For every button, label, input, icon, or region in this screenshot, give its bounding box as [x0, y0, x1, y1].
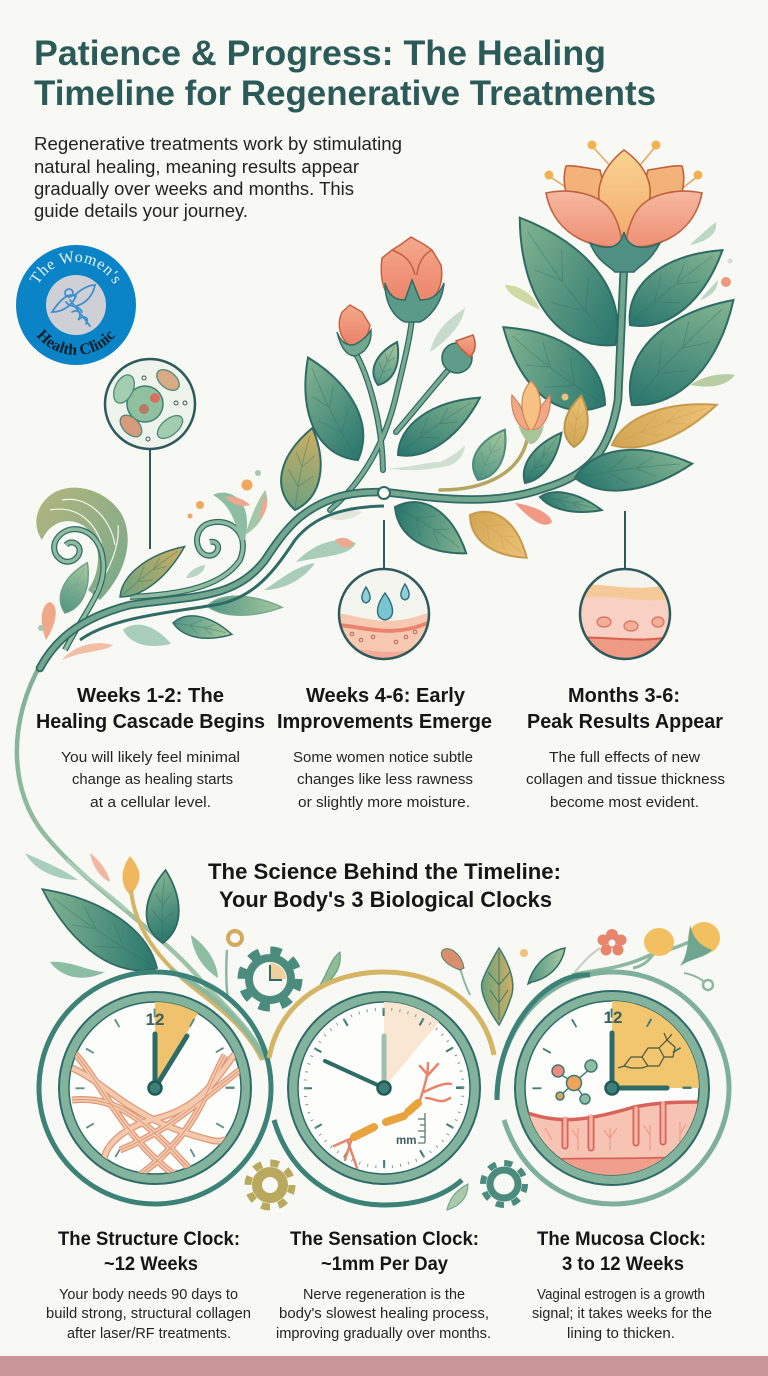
steroid structure: [618, 1033, 675, 1068]
clock: structure: [39, 972, 271, 1204]
fern curl: [36, 488, 128, 650]
main stem: [40, 265, 624, 668]
upper left foliage: [25, 853, 340, 1060]
clock caption: mucosa: The Mucosa Clock:: [537, 1229, 706, 1250]
clinic logo badge: [16, 245, 136, 365]
milestone: weeks 1-2: You will likely feel minimal: [61, 749, 240, 766]
clock caption: structure: ~12 Weeks: [104, 1254, 198, 1275]
clock caption: structure: after laser/RF treatments.: [67, 1325, 231, 1342]
icon: thick skin cross-section: [575, 511, 675, 665]
clock caption: mucosa: signal; it takes weeks for the: [532, 1305, 712, 1322]
mm ruler: mm: [396, 1135, 416, 1147]
clock caption: mucosa: [532, 1229, 712, 1342]
milestone: months 3-6: [526, 685, 725, 811]
milestone: weeks 4-6: Improvements Emerge: [277, 711, 492, 733]
collagen fibres: [72, 1050, 240, 1175]
title: Timeline for Regenerative Treatments: [34, 74, 656, 113]
large flower: [544, 140, 702, 272]
progress wedge: [155, 1002, 198, 1088]
gear: green: [483, 1163, 525, 1205]
clock caption: structure: [46, 1229, 251, 1342]
right bud: [442, 335, 475, 373]
title: [34, 34, 656, 113]
small flower: [512, 381, 550, 444]
clock caption: sensation: [276, 1229, 491, 1342]
small coral flower: [598, 929, 626, 956]
sprig petals and dots: [38, 470, 362, 660]
milestone: months 3-6: The full effects of new: [549, 749, 700, 766]
branch leaves: [275, 200, 753, 569]
second curl: [130, 522, 243, 597]
intro text: natural healing, meaning results appear: [34, 156, 359, 177]
milestone: weeks 4-6: or slightly more moisture.: [298, 794, 470, 811]
milestone: weeks 1-2: Weeks 1-2: The: [77, 685, 224, 707]
clock caption: mucosa: Vaginal estrogen is a growth: [537, 1286, 705, 1303]
neuron: [334, 1063, 451, 1168]
milestone: weeks 1-2: at a cellular level.: [90, 794, 211, 811]
clock: sensation: [269, 972, 494, 1205]
molecule: [552, 1060, 597, 1104]
clock caption: structure: The Structure Clock:: [58, 1229, 240, 1250]
footer bar: [0, 1356, 768, 1376]
ticks: [308, 1012, 460, 1164]
clock caption: mucosa: lining to thicken.: [567, 1325, 675, 1342]
tulip bud: [381, 237, 444, 322]
milestone: weeks 1-2: Healing Cascade Begins: [36, 711, 265, 733]
intro text: [34, 133, 402, 221]
milestone: weeks 4-6: Some women notice subtle: [293, 749, 473, 766]
progress wedge: [384, 1002, 439, 1088]
milestone: weeks 1-2: [36, 685, 265, 811]
gear: olive: [248, 1163, 292, 1207]
pale vine linking timeline to clocks: [17, 662, 264, 1060]
science heading: Your Body's 3 Biological Clocks: [219, 887, 552, 912]
intro text: guide details your journey.: [34, 200, 248, 221]
hands: [325, 1036, 384, 1088]
gear: clock gear: [242, 951, 298, 1007]
mucosa lining: [528, 1100, 698, 1175]
illustration: healing vine: [36, 140, 753, 668]
left bud: [337, 305, 371, 356]
milestone: weeks 1-2: change as healing starts: [72, 771, 233, 788]
intro text: Regenerative treatments work by stimulating: [34, 133, 402, 154]
clock decorations: [25, 853, 720, 1210]
hands: [155, 1034, 187, 1088]
numeral: 12: [604, 1008, 622, 1027]
faded accents: [388, 222, 735, 525]
milestone: months 3-6: become most evident.: [550, 794, 699, 811]
clock caption: sensation: The Sensation Clock:: [290, 1229, 479, 1250]
title: Patience & Progress: The Healing: [34, 34, 606, 73]
science heading: The Science Behind the Timeline:: [208, 859, 561, 884]
milestone: weeks 4-6: [277, 685, 492, 811]
upper right foliage: [441, 922, 720, 1025]
icon: water drops over skin: [335, 520, 430, 665]
icon: cells circle: [105, 359, 195, 549]
clock caption: mucosa: 3 to 12 Weeks: [562, 1254, 684, 1275]
mm ruler: [396, 1113, 425, 1147]
clinic logo badge: Health Clinic: [36, 328, 115, 356]
milestone: months 3-6: Peak Results Appear: [527, 711, 723, 733]
milestone: weeks 4-6: Weeks 4-6: Early: [306, 685, 466, 707]
clock: mucosa: [497, 972, 729, 1204]
clock caption: structure: build strong, structural collagen: [46, 1305, 251, 1322]
lower left leaves: [54, 537, 282, 652]
clock caption: sensation: ~1mm Per Day: [321, 1254, 448, 1275]
clock caption: sensation: Nerve regeneration is the: [303, 1286, 465, 1303]
ticks: [80, 1013, 230, 1163]
parallel lower stem: [80, 506, 384, 640]
small lower leaf: [447, 1184, 468, 1210]
stem node: [378, 487, 390, 499]
science heading: [208, 859, 561, 912]
clock caption: sensation: improving gradually over months.: [276, 1325, 491, 1342]
milestone: months 3-6: Months 3-6:: [568, 685, 680, 707]
icon: caduceus: [52, 285, 95, 326]
middle branch stems: [330, 318, 527, 510]
milestone: months 3-6: collagen and tissue thickness: [526, 771, 725, 788]
clock caption: structure: Your body needs 90 days to: [59, 1286, 238, 1303]
ticks: [537, 1013, 687, 1163]
numeral: 12: [146, 1010, 164, 1029]
clock caption: sensation: body's slowest healing process,: [279, 1305, 489, 1322]
clinic logo badge: The Women's: [29, 251, 120, 284]
hands: [612, 1033, 667, 1088]
progress wedge: [612, 1001, 699, 1088]
milestone: weeks 4-6: changes like less rawness: [297, 771, 473, 788]
intro text: gradually over weeks and months. This: [34, 178, 354, 199]
